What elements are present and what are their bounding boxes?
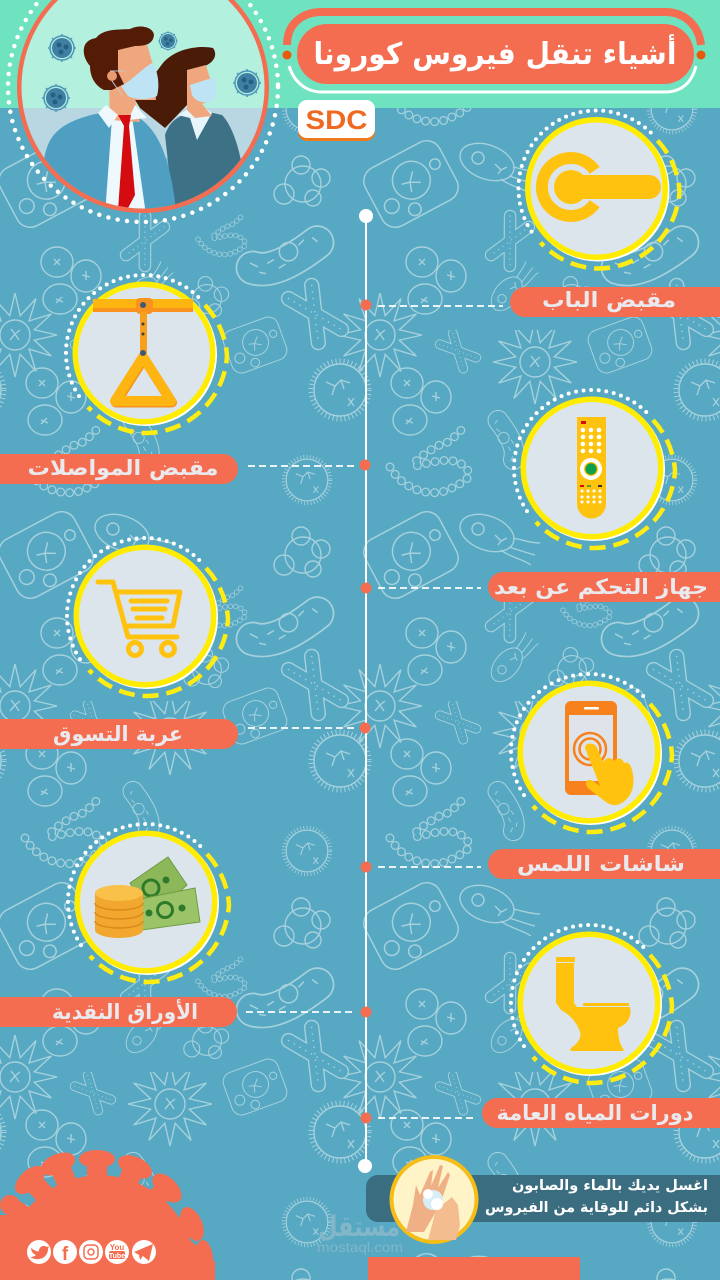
icon: money and coins [95, 857, 200, 938]
callout: hand washing [366, 1157, 720, 1242]
callout text [485, 1178, 708, 1216]
SDC logo [298, 100, 375, 141]
watermark: mostaql.com [317, 1239, 403, 1255]
label: جهاز التحكم عن بعد [494, 575, 708, 599]
icon: washing hands [392, 1157, 476, 1242]
callout text: بشكل دائم للوقاية من الفيروس [485, 1200, 708, 1216]
social icons [27, 1240, 156, 1265]
icon: remote [577, 417, 606, 518]
title banner [282, 12, 706, 92]
label: مقبض المواصلات [28, 456, 218, 480]
label [482, 1098, 720, 1128]
SDC logo: SDC [306, 105, 368, 135]
item: remote control [378, 390, 720, 602]
title text: أشياء تنقل فيروس كورونا [314, 34, 676, 72]
connector [248, 727, 355, 729]
portrait circle with masked people [0, 0, 290, 230]
icon: instagram [79, 1240, 103, 1264]
connector [246, 1011, 355, 1013]
item: cash [0, 824, 355, 1027]
label: شاشات اللمس [517, 852, 685, 876]
icon: door handle [542, 158, 661, 216]
icon: facebook: f [62, 1244, 69, 1265]
label: عربة التسوق [53, 722, 183, 746]
label: الأوراق النقدية [52, 998, 198, 1024]
icon: cart [98, 582, 180, 656]
label: دورات المياه العامة [496, 1101, 694, 1125]
item: shopping cart [0, 538, 355, 749]
icon: toilet [556, 957, 630, 1051]
icon: youtube: Tube [109, 1253, 125, 1260]
item: touch screen [378, 674, 720, 879]
watermark: مستقل [318, 1210, 400, 1243]
icon: youtube: You [110, 1243, 124, 1252]
man figure [44, 26, 176, 208]
connector [378, 866, 481, 868]
label: مقبض الباب [542, 288, 676, 312]
label [0, 997, 237, 1027]
woman figure [135, 47, 241, 205]
vertical timeline [358, 209, 373, 1173]
label [0, 719, 238, 749]
icon: telegram [132, 1240, 156, 1264]
virus shape with social icons [0, 1148, 215, 1280]
icon: youtube [105, 1240, 129, 1264]
icon: hanging strap [93, 298, 193, 402]
connector [378, 587, 481, 589]
icon: phone and hand [565, 701, 634, 805]
icon: virus particles [42, 31, 261, 112]
item: transport handle [0, 275, 355, 484]
header band [0, 0, 720, 108]
bottom coral block [368, 1257, 580, 1280]
connector [248, 465, 355, 467]
label [0, 454, 238, 484]
item: door handle [378, 111, 720, 317]
icon: twitter [27, 1240, 51, 1264]
connector [378, 1117, 475, 1119]
callout text: اغسل يديك بالماء والصابون [512, 1178, 708, 1194]
item: public toilets [378, 925, 720, 1128]
label [488, 849, 720, 879]
connector [378, 305, 503, 307]
watermark [317, 1210, 403, 1255]
label [510, 287, 720, 317]
